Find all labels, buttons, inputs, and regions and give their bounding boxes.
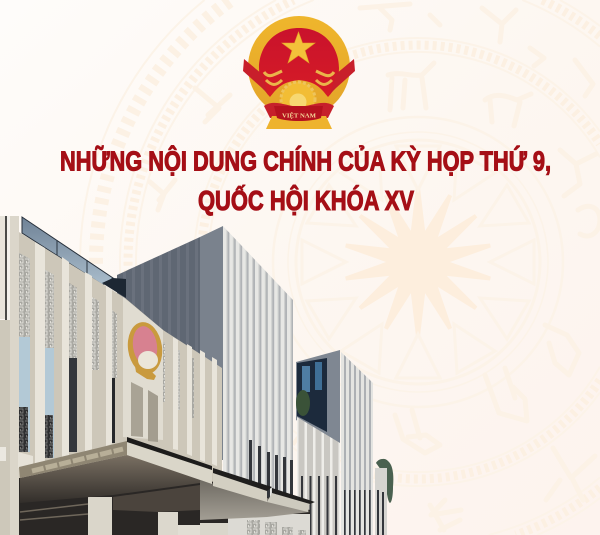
grey tower left face [117,237,200,354]
drum birds and animals [150,4,600,530]
emblem side ribbons [243,59,355,94]
facade white panel [123,297,163,440]
far tower glass [297,358,327,432]
right shrubs [375,459,393,535]
emblem star [282,32,315,63]
canopy right fascia [213,473,267,502]
emblem gold disc [248,16,350,118]
canopy underside middle [113,485,200,512]
canopy left fascia frieze [32,449,123,471]
title line 2: QUỐC HỘI KHÓA XV [198,184,414,216]
coat of arms [243,16,355,129]
lower recesses [131,382,143,437]
grey tower fins [223,226,293,496]
canopy [19,437,315,520]
lower right wing [296,417,340,535]
drum triangles [302,146,534,378]
canopy underside right [200,480,310,520]
far tower blue side [296,350,340,445]
canopy ground beams [20,504,88,520]
canopy left fascia [19,441,127,478]
ground floor grilles [247,520,306,535]
building: National Assembly House [0,216,393,535]
entrance dark hall [19,478,310,535]
entrance columns [88,497,112,535]
title [60,144,551,216]
pilasters [35,242,217,466]
facade wall [19,232,222,490]
emblem red field [259,28,339,97]
canopy underside left [20,455,200,503]
tree [296,390,310,416]
far tower [296,350,374,535]
canopy centre fascia [127,442,212,484]
far tower fins [341,350,374,535]
entrance right stone wall [228,514,310,535]
wall emblem [125,320,165,380]
left edge column [0,216,33,535]
emblem lower banner: VIỆT NAM [282,112,316,120]
window slots [19,253,194,458]
emblem rice ears [264,71,334,84]
main stone facade [0,216,222,535]
tower lower windows [249,440,293,510]
main grey tower [117,226,293,498]
emblem gear [281,82,315,116]
grey tower corner [200,226,223,460]
entrance below canopy [19,478,310,535]
drum central star [346,188,490,336]
glass balustrade [22,217,113,285]
